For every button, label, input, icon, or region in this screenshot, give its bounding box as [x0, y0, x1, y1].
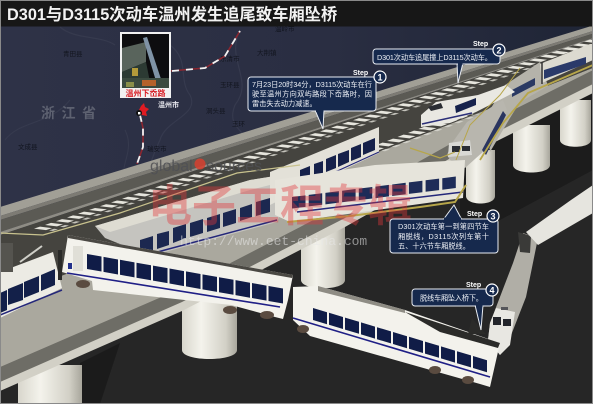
map place labels: 大荆镇 [257, 48, 277, 57]
map place labels: 洞头县 [206, 106, 226, 115]
callout step 2: 2 [496, 46, 502, 56]
callout step 4: 4 [489, 286, 495, 296]
fallen car D centre [62, 235, 293, 319]
railway ties lower track [372, 113, 479, 151]
D301 upper train cars [485, 44, 593, 152]
callout step 3 [390, 205, 499, 253]
callout step 2: Step [473, 41, 488, 48]
callout step 1: 雷击失去动力减速。 [252, 99, 317, 108]
fallen car F right [293, 286, 500, 387]
photo: accident site: 温州下岙路 [126, 88, 166, 98]
callout step 3: 厢脱线，D3115次列车第十 [398, 232, 489, 241]
bridge pillars [18, 100, 591, 404]
watermark: global sources: global [150, 158, 193, 175]
callout step 1: 驶至温州方向双屿路段下岙路时，因 [252, 90, 372, 98]
overhead cables [0, 65, 593, 235]
map place labels: 文成县 [18, 142, 38, 151]
railway ties upper track [40, 39, 593, 231]
watermark: 电子工程专辑: 电子工程专辑 [148, 182, 412, 231]
map place labels: 温岭市 [275, 24, 295, 33]
fallen car E left [0, 243, 62, 318]
map place labels: 青田县 [63, 49, 83, 58]
callout step 1: 7月23日20时34分，D3115次动车在行 [252, 80, 372, 89]
callout step 3: 3 [490, 212, 496, 222]
derailed car B [95, 172, 300, 254]
callout step 1 [248, 70, 386, 129]
derailed car C [275, 160, 465, 222]
watermark: url: http://www.eet-china.com [180, 234, 367, 249]
map place labels: 玉环县 [220, 81, 240, 89]
callout step 1: Step [353, 70, 368, 77]
photo: accident site [120, 32, 171, 98]
title bar [0, 0, 593, 26]
map background [0, 0, 593, 240]
map place labels: 玉环 [232, 120, 246, 128]
watermark: global sources: sources [206, 158, 262, 175]
D3115 tail locomotive [447, 100, 507, 168]
track bed [0, 39, 593, 320]
lower bridge deck [0, 68, 593, 391]
callout step 3: Step [467, 211, 482, 218]
callout step 3: 五、十六节车厢脱线。 [398, 242, 470, 250]
callout step 3: D301次动车第一到第四节车 [398, 222, 489, 231]
bridge parapet [0, 26, 593, 235]
car H upward [526, 185, 593, 245]
map place labels [18, 24, 295, 153]
accident marker [136, 103, 149, 116]
title bar: D301与D3115次动车温州发生追尾致车厢坠桥 [7, 5, 337, 24]
callout step 2: D301次动车追尾撞上D3115次动车。 [377, 53, 492, 62]
callout step 4: Step [466, 282, 481, 289]
D301 locomotive [421, 85, 515, 127]
callout step 2 [373, 41, 505, 83]
railway route on map [137, 31, 240, 164]
locomotive G fallen [488, 232, 538, 355]
callout step 4 [412, 282, 498, 330]
callout step 1: 1 [377, 72, 383, 82]
callout step 4: 脱线车厢坠入桥下。 [420, 294, 483, 302]
watermark: global sources [150, 158, 262, 175]
map province label: 浙江省 [41, 105, 102, 121]
city label: 温州市 [158, 100, 179, 109]
derailed car A [270, 127, 379, 205]
map place labels: 瑞安市 [147, 144, 167, 153]
ground below bridge [0, 85, 593, 404]
map place labels: 乐清市 [220, 54, 240, 63]
